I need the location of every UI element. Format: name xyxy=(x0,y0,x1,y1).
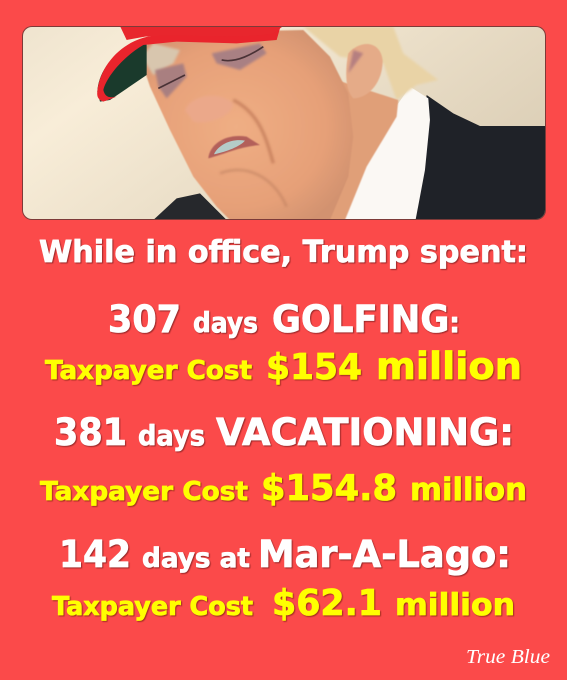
cap brim edge xyxy=(97,28,280,102)
signature: true blue: True Blue xyxy=(466,646,550,668)
cost: vacationing: million xyxy=(410,472,527,508)
cost: golfing: $154 xyxy=(266,347,362,388)
stat: vacationing days: VACATIONING: xyxy=(216,411,514,454)
stat: mar-a-lago days: days at xyxy=(142,543,250,574)
stat: golfing days: 307 xyxy=(108,298,181,341)
cost: mar-a-lago xyxy=(52,583,515,624)
cost: vacationing xyxy=(40,468,527,509)
cost: golfing xyxy=(45,345,522,388)
cost: golfing: million xyxy=(376,345,522,388)
cost: golfing: Taxpayer Cost xyxy=(45,356,252,386)
mouth xyxy=(208,136,260,158)
stat: golfing days: GOLFING: xyxy=(272,298,460,341)
eye sockets xyxy=(155,63,187,98)
stat: golfing days xyxy=(108,298,460,341)
cost: mar-a-lago: Taxpayer Cost xyxy=(52,592,253,622)
stat: mar-a-lago days: 142 xyxy=(59,533,131,576)
stat: mar-a-lago days: Mar-A-Lago: xyxy=(258,533,511,576)
photo: man in red cap xyxy=(22,26,553,227)
cap crown xyxy=(120,26,283,40)
stat: mar-a-lago days xyxy=(59,533,511,576)
cap brim underside xyxy=(97,38,147,102)
cost: vacationing: Taxpayer Cost xyxy=(40,477,248,507)
ear xyxy=(346,44,383,98)
nose xyxy=(186,96,232,122)
stat: vacationing days: 381 xyxy=(54,411,127,454)
cost: mar-a-lago: $62.1 xyxy=(272,583,382,624)
shirt collar xyxy=(343,87,430,223)
jowl shadow xyxy=(233,100,273,163)
stat: vacationing days: days xyxy=(138,419,205,452)
stat: golfing days: days xyxy=(193,306,258,339)
teeth xyxy=(214,140,245,154)
neck xyxy=(330,82,399,219)
cost: mar-a-lago: million xyxy=(395,588,515,623)
hair back xyxy=(303,27,438,100)
face xyxy=(140,30,353,223)
eyebrow hair xyxy=(146,44,180,76)
stat: vacationing days xyxy=(54,411,514,454)
suit xyxy=(416,95,545,219)
heading: while in office: While in office, Trump spent: xyxy=(39,235,528,270)
cost: vacationing: $154.8 xyxy=(261,468,397,509)
